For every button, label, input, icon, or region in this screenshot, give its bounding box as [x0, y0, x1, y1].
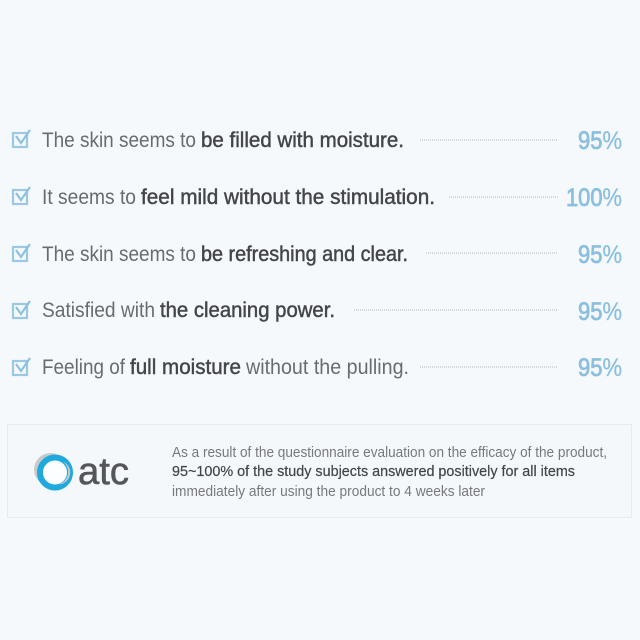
- row 1: filled with moisture: [13, 127, 622, 155]
- row 1 statement: The skin seems to: [42, 128, 196, 152]
- row 5 percentage: 95%: [578, 354, 622, 382]
- result explanation text: As a result of the questionnaire evaluation on the efficacy of the product,: [172, 445, 607, 461]
- row 2: feels mild: [13, 184, 622, 212]
- icon: checkbox 4: [13, 301, 30, 318]
- result explanation text: immediately after using the product to 4 weeks later: [172, 484, 485, 500]
- row 2 statement: It seems to: [42, 185, 136, 209]
- row 3: refreshing and clear: [13, 241, 622, 269]
- row 3 statement: be refreshing and clear.: [201, 242, 408, 266]
- row 5 statement: Feeling of: [42, 355, 125, 379]
- row 5 statement: without the pulling.: [245, 355, 409, 379]
- icon: checkbox 5: [13, 358, 30, 375]
- row 3 percentage: 95%: [578, 241, 622, 269]
- row 4 percentage: 95%: [578, 298, 622, 326]
- row 5: full moisture: [13, 354, 622, 382]
- row 2 percentage: 100%: [566, 184, 622, 212]
- icon: checkbox 2: [13, 187, 30, 204]
- icon: checkbox 3: [13, 244, 30, 261]
- panel: atc result note: [8, 424, 632, 518]
- row 1 statement: be filled with moisture.: [201, 128, 404, 152]
- result explanation text: [172, 445, 607, 500]
- row 2 statement: feel mild without the stimulation.: [141, 185, 435, 209]
- row 4 statement: Satisfied with: [42, 298, 155, 322]
- row 4 statement: the cleaning power.: [160, 298, 335, 322]
- logo wordmark: atc: [78, 451, 129, 493]
- icon: checkbox 1: [13, 130, 30, 147]
- atc logo: [34, 451, 129, 493]
- row 4: cleaning power: [13, 298, 622, 326]
- row 3 statement: The skin seems to: [42, 242, 196, 266]
- row 5 statement: full moisture: [130, 355, 241, 379]
- result explanation text: 95~100% of the study subjects answered positively for all items: [172, 464, 575, 480]
- icon: atc ring: [34, 453, 70, 488]
- row 1 percentage: 95%: [578, 127, 622, 155]
